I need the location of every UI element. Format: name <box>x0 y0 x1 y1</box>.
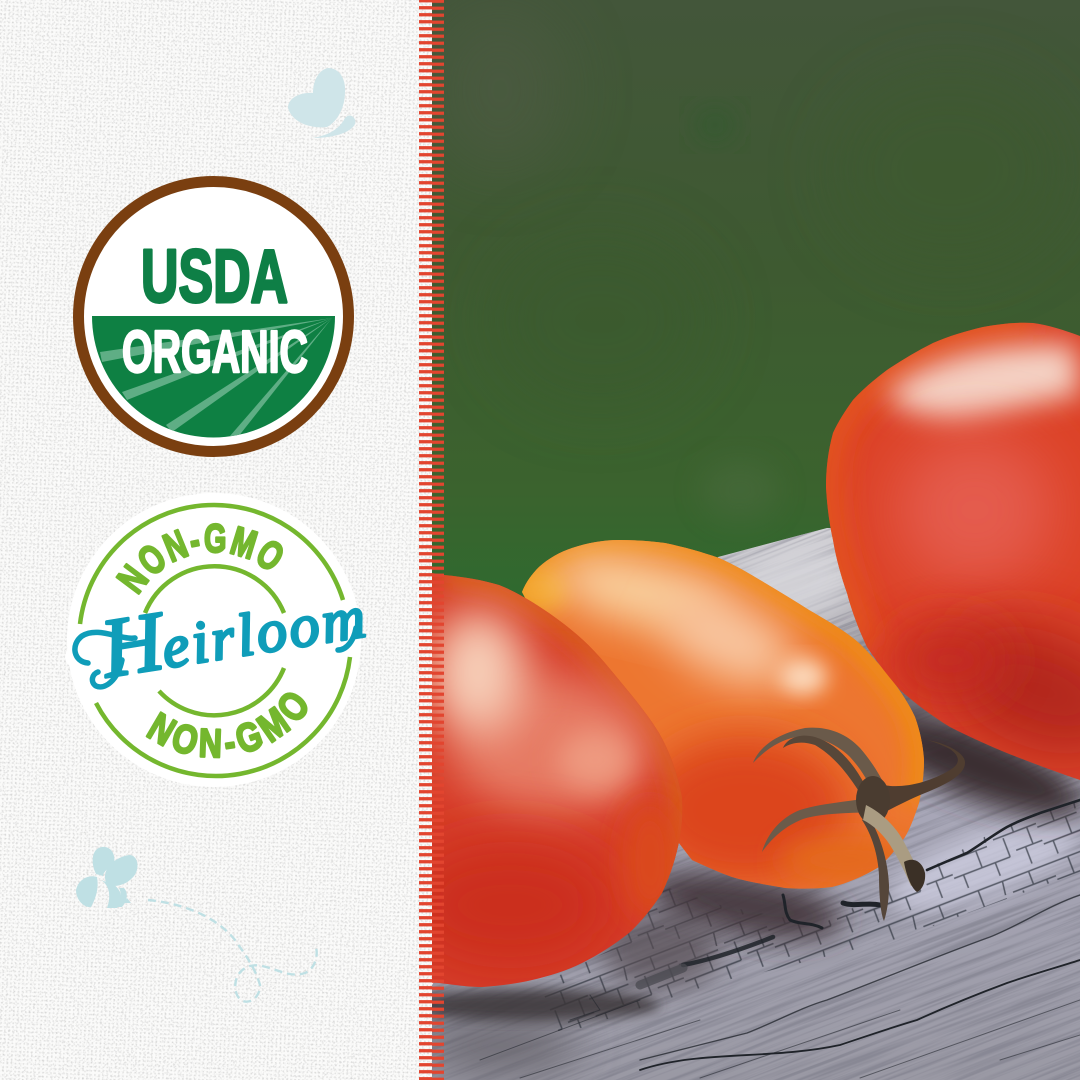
flight path <box>148 900 317 1002</box>
ORGANIC wordmark: ORGANIC <box>122 319 308 385</box>
cracked paint blocks <box>544 803 1080 1032</box>
sepal: top outer <box>753 728 882 780</box>
NON-GMO upper: N <box>109 557 157 601</box>
bee <box>76 847 137 908</box>
icon: butterfly <box>288 68 355 138</box>
tomato stem <box>753 728 965 921</box>
dark bottom-left wood <box>420 1015 580 1075</box>
calyx hub <box>856 776 888 820</box>
NON-GMO lower <box>140 682 318 766</box>
green field <box>92 316 335 438</box>
NON-GMO lower: N <box>198 720 223 766</box>
NON-GMO upper <box>109 516 292 601</box>
badge: Non-GMO Heirloom <box>60 493 374 787</box>
NON-GMO lower: O <box>268 682 318 730</box>
red stitched stripe divider <box>419 0 444 1080</box>
NON-GMO upper: O <box>248 531 292 580</box>
stem cut end <box>904 860 925 892</box>
Heirloom script: Heirloom <box>94 562 374 696</box>
sepal: right <box>886 740 965 810</box>
weathered wood board <box>400 528 1080 1080</box>
stem shaft <box>863 805 913 886</box>
sepal: top inner <box>783 736 866 790</box>
NON-GMO upper: M <box>226 518 262 568</box>
NON-GMO lower: O <box>167 714 203 764</box>
badge rings <box>80 505 350 776</box>
NON-GMO lower: N <box>140 704 183 754</box>
badge: USDA Organic <box>78 182 348 452</box>
blurred lawn background <box>430 0 1080 600</box>
NON-GMO upper: O <box>130 535 175 584</box>
NON-GMO lower: M <box>249 698 297 751</box>
icon: bee with dashed flight path <box>76 847 317 1002</box>
wood cracks <box>480 800 1080 1078</box>
tomato: left <box>432 573 682 987</box>
NON-GMO upper: G <box>204 516 227 561</box>
NON-GMO upper: - <box>186 518 204 564</box>
pale back edge of board <box>730 532 850 621</box>
panel: tomato photo <box>400 0 1080 1080</box>
shadow under tomatoes <box>904 695 1080 840</box>
NON-GMO upper: N <box>157 522 194 571</box>
NON-GMO lower: - <box>221 719 238 765</box>
tomato: middle <box>510 539 924 889</box>
pale cracked paint <box>888 816 1080 921</box>
tomato: right <box>826 323 1080 781</box>
sepal: lower left <box>762 800 859 852</box>
sepal: downward <box>862 815 889 921</box>
panel: linen background <box>0 0 432 1080</box>
USDA heading: USDA <box>141 234 288 318</box>
NON-GMO lower: G <box>230 712 268 763</box>
